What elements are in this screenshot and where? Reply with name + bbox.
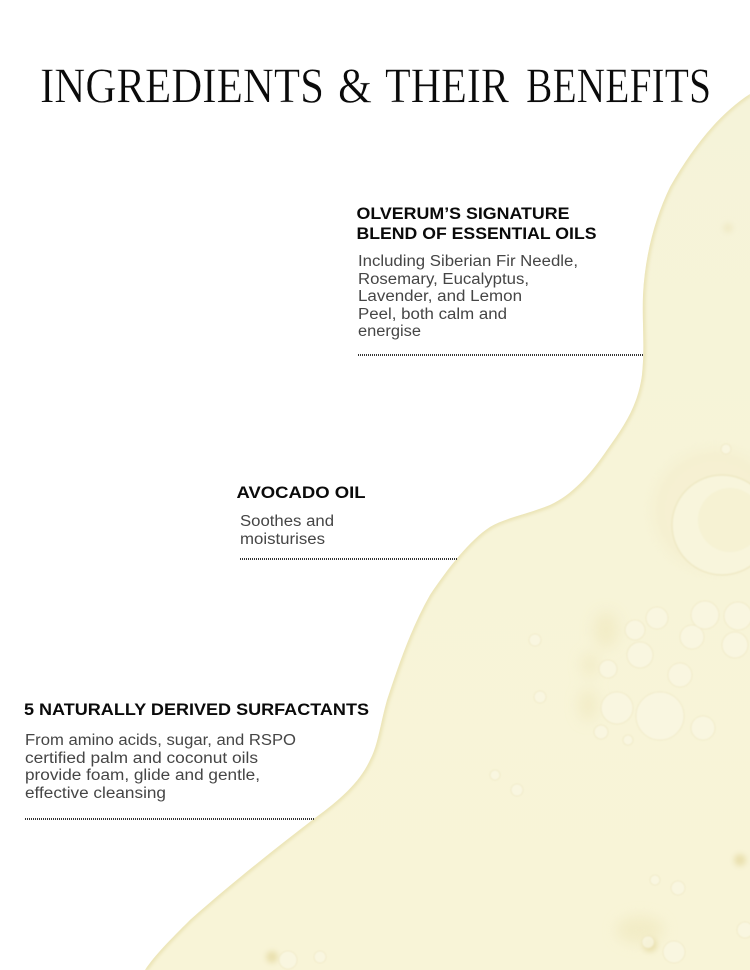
heading: avocado oil: AVOCADO OIL — [236, 483, 366, 502]
title — [40, 57, 711, 113]
body: avocado oil: Soothes and — [240, 513, 334, 530]
body: surfactants: certified palm and coconut oils — [25, 750, 258, 767]
body: signature blend: energise — [358, 323, 421, 340]
body: surfactants: provide foam, glide and gentle, — [25, 767, 260, 784]
heading: signature blend — [356, 204, 596, 243]
body: signature blend: Rosemary, Eucalyptus, — [358, 271, 529, 288]
body: avocado oil: moisturises — [240, 531, 325, 548]
body: signature blend — [358, 253, 578, 340]
heading: surfactants: 5 NATURALLY DERIVED SURFACTANTS — [24, 700, 369, 719]
bubble cluster — [279, 444, 750, 969]
oil swatch background — [140, 90, 750, 970]
text block: surfactants — [24, 700, 369, 802]
heading: signature blend: OLVERUM’S SIGNATURE — [356, 204, 570, 223]
title: THEIR — [385, 57, 510, 113]
body: surfactants: From amino acids, sugar, and RSPO — [25, 732, 296, 749]
body: surfactants — [25, 732, 296, 802]
body: signature blend: Peel, both calm and — [358, 306, 507, 323]
body: signature blend: Including Siberian Fir Needle, — [358, 253, 578, 270]
text block: signature blend — [356, 204, 596, 340]
small dark flecks — [266, 223, 746, 963]
soft shading in the oil — [579, 612, 664, 944]
title: & — [338, 57, 372, 113]
title: INGREDIENTS — [40, 57, 324, 113]
body: signature blend: Lavender, and Lemon — [358, 288, 522, 305]
body: avocado oil — [240, 513, 334, 548]
body: surfactants: effective cleansing — [25, 785, 166, 802]
swirl bubble — [670, 474, 750, 576]
heading: signature blend: BLEND OF ESSENTIAL OILS — [356, 224, 596, 243]
text block: avocado oil — [236, 483, 366, 548]
